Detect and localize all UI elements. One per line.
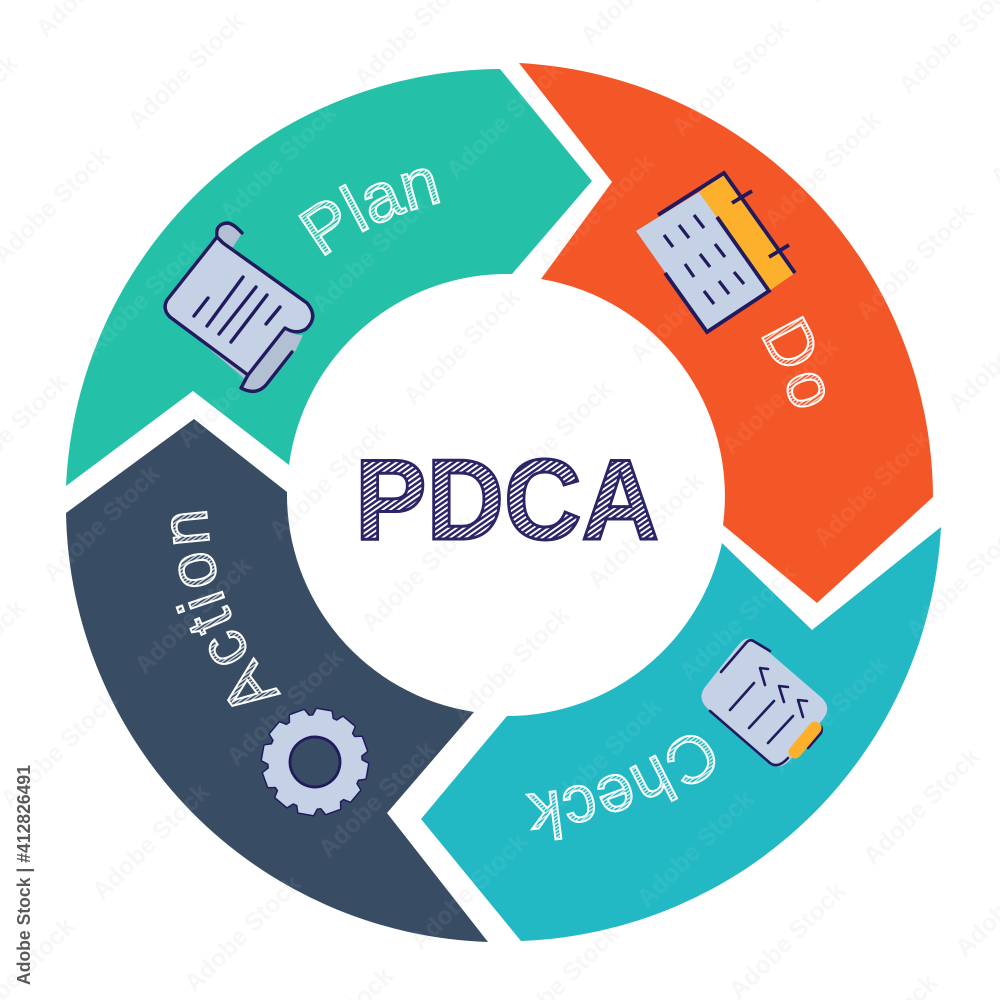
segment: Check arrow	[421, 527, 941, 941]
center title: PDCA: PDCA	[355, 437, 659, 564]
label: Do: Do	[761, 316, 826, 408]
icon: check clipboard	[701, 638, 827, 767]
label: Action: Action	[170, 510, 282, 707]
icon: plan scroll	[161, 223, 313, 391]
label: Check: Check	[524, 734, 716, 840]
label: Plan: Plan	[298, 168, 440, 256]
stock id text: Adobe Stock | #412826491	[14, 765, 34, 985]
segment: Do arrow	[519, 63, 933, 603]
icon: action gear	[254, 701, 376, 823]
icon: do calendar	[636, 173, 795, 332]
segment: Action arrow	[66, 419, 488, 942]
segment: Plan arrow	[66, 69, 592, 486]
